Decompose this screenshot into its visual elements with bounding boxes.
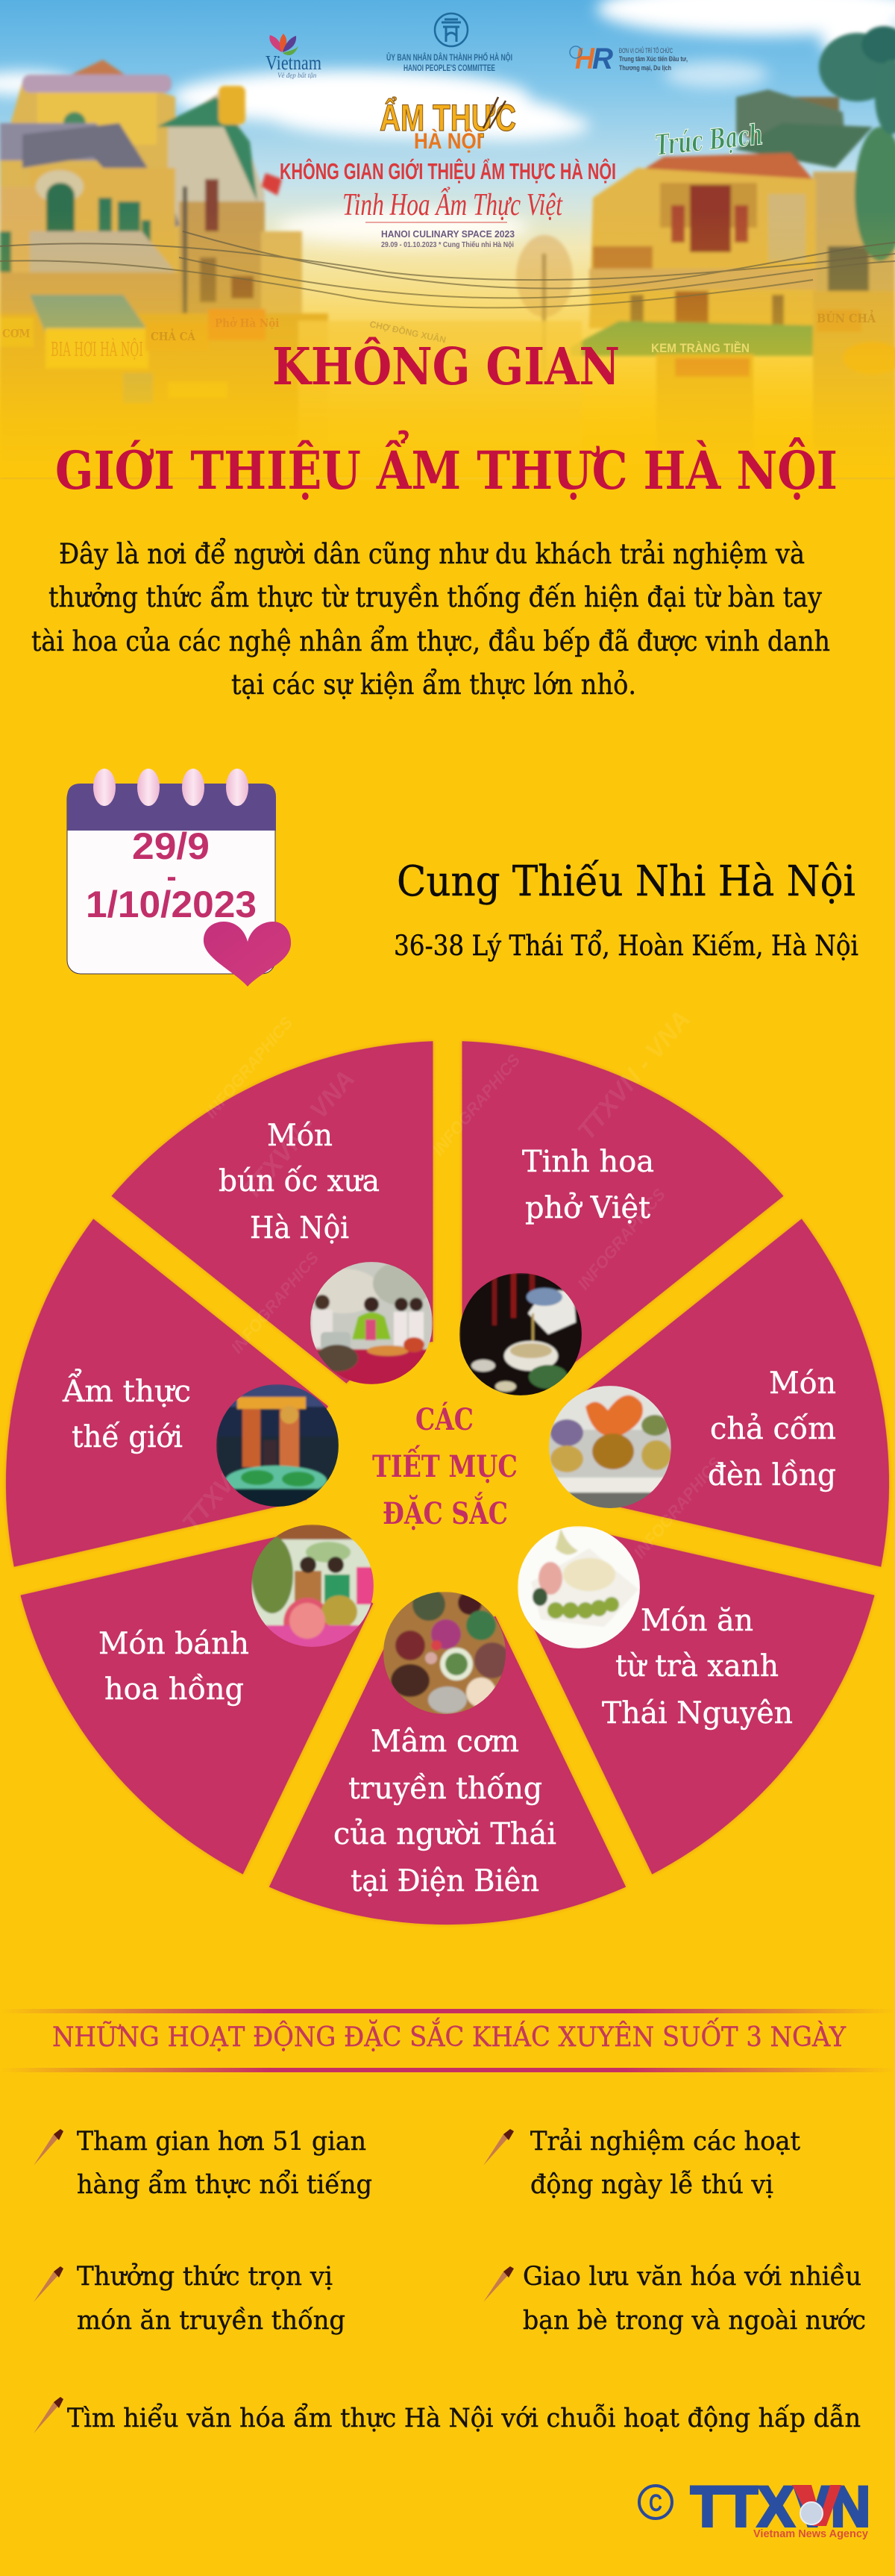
activity: food culture: Tìm hiểu văn hóa ẩm thực Hà Nội với chuỗi hoạt động hấp dẫn (67, 2402, 861, 2433)
segment: bún ốc xưa: Món (267, 1119, 333, 1153)
logo: HR promotion centre: Thương mại, Du lịch (619, 64, 671, 72)
segment: trà xanh: Thái Nguyên (602, 1696, 793, 1731)
logo: Vietnam tourism (266, 34, 321, 79)
intro paragraph: thưởng thức ẩm thực từ truyền thống đến hiện đại từ bàn tay (48, 581, 822, 613)
painted signs: KEM TRÀNG TIỀN (651, 341, 750, 355)
event title: KHÔNG GIAN GIỚI THIỆU ẨM THỰC HÀ NỘI (280, 157, 616, 184)
segment: chả cốm: đèn lồng (708, 1458, 836, 1492)
painted signs: CƠM (2, 327, 30, 340)
venue: Cung Thiếu Nhi Hà Nội (397, 857, 855, 906)
watermark: INFOGRAPHICS (429, 1051, 524, 1159)
segment: mâm cơm: của người Thái (333, 1817, 556, 1851)
activity: traditional dishes: Thưởng thức trọn vị (77, 2262, 333, 2292)
segment: mâm cơm: Mâm cơm (371, 1725, 519, 1759)
event title: 29.09 - 01.10.2023 * Cung Thiếu nhi Hà Nội (381, 240, 514, 249)
painted signs: CHỢ ĐỒNG XUÂN (368, 318, 447, 346)
painted signs: BÚN CHẢ (817, 308, 876, 325)
segment: mâm cơm (269, 1616, 626, 1925)
right buildings (813, 172, 895, 478)
watermark: TTXVN - VNA (572, 1005, 696, 1145)
segment: phở Việt: Tinh hoa (522, 1145, 654, 1179)
logo: HR promotion centre: ĐƠN VỊ CHỦ TRÌ TỔ CHỨC (619, 46, 673, 54)
logo: Hanoi People's Committee: HANOI PEOPLE'S COMMITTEE (403, 63, 495, 73)
segment: bánh hoa hồng: hoa hồng (104, 1672, 244, 1707)
watermark: INFOGRAPHICS (201, 1013, 296, 1122)
photo: green tea dish (518, 1526, 641, 1649)
photo: phở bowl (459, 1273, 582, 1396)
segment: trà xanh: Món ăn (641, 1604, 753, 1638)
logo: HR promotion centre (570, 43, 688, 75)
segment: bánh hoa hồng: Món bánh (98, 1627, 249, 1661)
watermark: INFOGRAPHICS (227, 1248, 322, 1357)
segment: bún ốc xưa: Hà Nội (250, 1211, 349, 1245)
wheel centre label: CÁC (415, 1402, 474, 1437)
venue (394, 857, 858, 962)
activity: festival experiences (483, 2127, 800, 2200)
photo: carved phoenix (548, 1385, 671, 1511)
photo: Thái tray meal (383, 1588, 510, 1716)
icon: calendar with dates: - (166, 860, 177, 893)
photo: bún ốc performers (306, 1261, 433, 1385)
event logo: Ẩm Thực Hà Nội: ẨM THỰC (380, 97, 516, 139)
activity: traditional dishes: món ăn truyền thống (77, 2306, 345, 2336)
icon: chopstick (483, 2266, 514, 2302)
left buildings (0, 60, 298, 478)
event title: HANOI CULINARY SPACE 2023 (381, 228, 515, 240)
icon: calendar with dates (67, 769, 291, 987)
activity: cultural exchange: bạn bè trong và ngoài nước (523, 2306, 866, 2336)
segment: bún ốc xưa (95, 1007, 550, 1440)
wheel of seven food segments (0, 1007, 895, 1925)
segment: trà xanh (441, 1426, 895, 1898)
watermark: INFOGRAPHICS (574, 1185, 669, 1293)
segment: mâm cơm: tại Điện Biên (351, 1864, 539, 1898)
activity: food stalls (34, 2127, 372, 2200)
logo: TTXVN: Vietnam News Agency (753, 2527, 869, 2540)
activity: food stalls: hàng ẩm thực nổi tiếng (77, 2169, 372, 2200)
logo: Vietnam tourism: Vietnam (266, 51, 321, 74)
main heading: KHÔNG GIAN (272, 337, 620, 397)
watermark: TTXVN - VNA (236, 1065, 360, 1205)
event title: Tinh Hoa Ẩm Thực Việt (342, 187, 563, 222)
centre tree and far street (516, 235, 573, 317)
wheel centre label: TIẾT MỤC (372, 1445, 518, 1484)
segment: ẩm thực thế giới: thế giới (72, 1420, 183, 1454)
painted signs: CHẢ CÁ (151, 328, 195, 343)
segment: bánh hoa hồng (0, 1426, 454, 1898)
activity: festival experiences: Trải nghiệm các hoạt (530, 2127, 800, 2157)
logo: Hanoi People's Committee (386, 13, 512, 73)
flag (261, 173, 282, 196)
watermark: INFOGRAPHICS (630, 1454, 725, 1562)
segment: mâm cơm: truyền thống (348, 1772, 542, 1806)
logo: Vietnam tourism: Vẻ đẹp bất tận (277, 72, 317, 79)
venue: 36-38 Lý Thái Tổ, Hoàn Kiếm, Hà Nội (394, 930, 858, 962)
header illustration: Hanoi old quarter street (0, 0, 895, 478)
watermark (177, 1005, 725, 1562)
icon: calendar with dates: 1/10/2023 (86, 884, 257, 925)
main heading (55, 337, 838, 501)
painted signs: Phở Hà Nội (215, 316, 279, 330)
icon: chopstick (34, 2266, 63, 2302)
section heading band: NHỮNG HOẠT ĐỘNG ĐẶC SẮC KHÁC XUYÊN SUỐT 3 NGÀY (52, 2019, 847, 2053)
segment: phở Việt: phở Việt (525, 1191, 651, 1225)
intro paragraph: tài hoa của các nghệ nhân ẩm thực, đầu bếp đã được vinh danh (31, 625, 830, 657)
segment: chả cốm: Món (769, 1366, 836, 1401)
wheel centre label: ĐẶC SẮC (383, 1492, 508, 1531)
icon: chopstick (34, 2397, 63, 2433)
segment: trà xanh: từ trà xanh (615, 1649, 779, 1684)
activity: cultural exchange (483, 2262, 866, 2336)
segment: chả cốm (538, 1210, 895, 1627)
intro paragraph (31, 538, 830, 701)
painted signs: BIA HƠI HÀ NỘI (51, 337, 143, 361)
activity: festival experiences: động ngày lễ thú vị (530, 2169, 773, 2200)
logo: HR promotion centre: R (592, 43, 613, 75)
photo: rose cakes (251, 1525, 374, 1648)
logo: HR promotion centre: Trung tâm Xúc tiến Đầu tư, (619, 55, 688, 63)
main heading: GIỚI THIỆU ẨM THỰC HÀ NỘI (55, 431, 838, 501)
activity: food stalls: Tham gian hơn 51 gian (77, 2127, 366, 2157)
intro paragraph: Đây là nơi để người dân cũng như du khách trải nghiệm và (59, 538, 805, 570)
painted signs: Trúc Bạch (653, 117, 764, 162)
event logo: Ẩm Thực Hà Nội (380, 97, 516, 154)
photo: lantern display (216, 1384, 339, 1511)
logo: Hanoi People's Committee: ỦY BAN NHÂN DÂN THÀNH PHỐ HÀ NỘI (386, 51, 512, 63)
icon: calendar with dates: 29/9 (132, 825, 210, 867)
icon: chopstick (483, 2129, 514, 2166)
activity: traditional dishes (34, 2262, 345, 2336)
painted signs (2, 117, 876, 361)
event title (280, 157, 616, 249)
section heading band (0, 2009, 895, 2072)
logo: TTXVN: TTXVN (691, 2475, 870, 2539)
segment: ẩm thực thế giới: Ẩm thực (62, 1369, 191, 1409)
intro paragraph: tại các sự kiện ẩm thực lớn nhỏ. (231, 669, 636, 701)
segment: chả cốm: chả cốm (710, 1412, 836, 1446)
segment: phở Việt (345, 1007, 800, 1440)
segment: ẩm thực thế giới (0, 1210, 357, 1627)
logo: HR promotion centre: H (575, 43, 595, 75)
watermark: TTXVN - VNA (177, 1397, 301, 1537)
segment: bún ốc xưa: bún ốc xưa (219, 1164, 380, 1198)
logo: TTXVN: C (649, 2489, 662, 2516)
icon: chopstick (34, 2129, 63, 2166)
wheel centre label (372, 1402, 518, 1531)
activity: cultural exchange: Giao lưu văn hóa với nhiều (523, 2262, 861, 2292)
event logo: Ẩm Thực Hà Nội: HÀ NỘI (414, 128, 482, 154)
